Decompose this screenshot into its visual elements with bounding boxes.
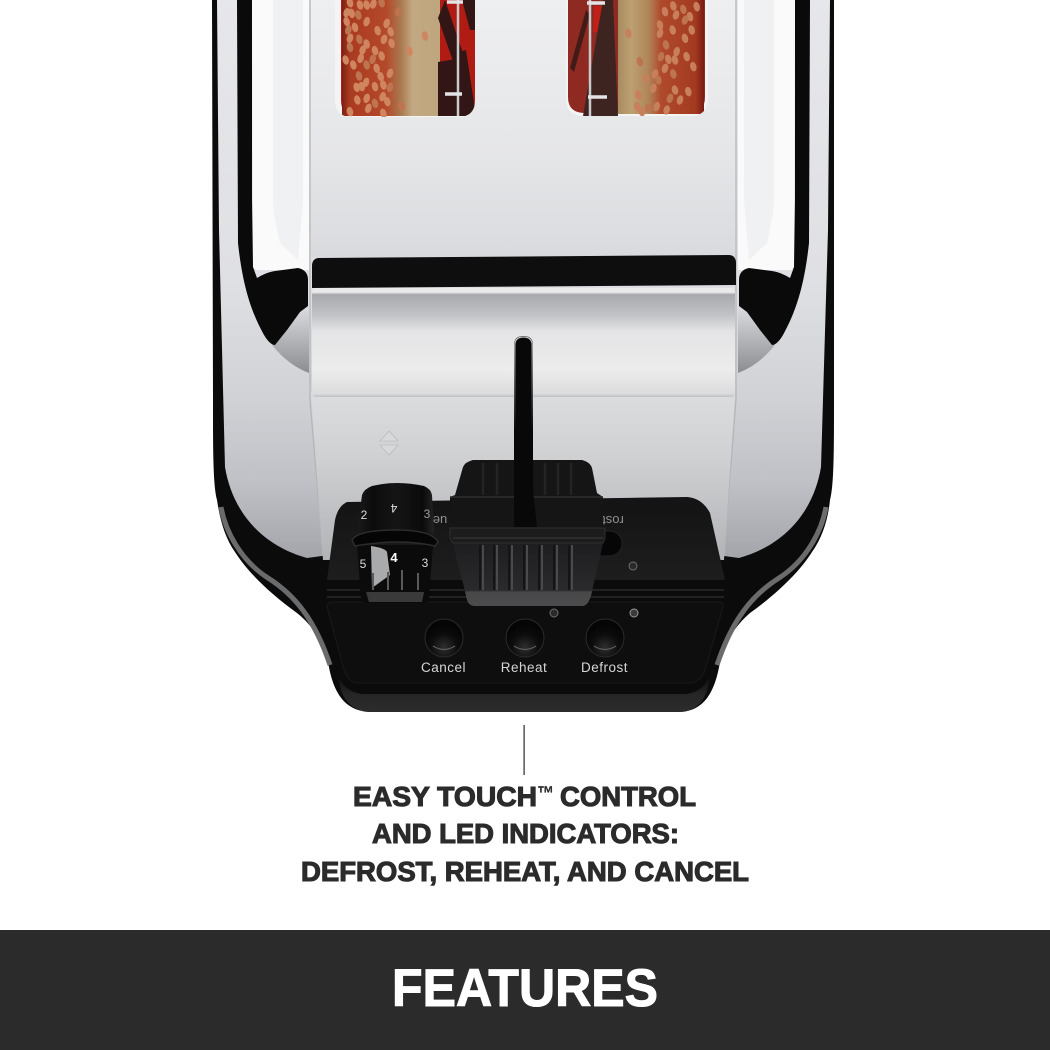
carriage block rim bbox=[450, 496, 603, 498]
left dark stripe and blob bbox=[237, 0, 308, 345]
reheat button: Reheat bbox=[501, 660, 547, 675]
base lip bbox=[338, 676, 710, 712]
callout leader line bbox=[524, 725, 525, 775]
upper control housing bbox=[327, 497, 725, 580]
callout text: CONTROL bbox=[560, 781, 696, 812]
rolled chrome section bbox=[312, 288, 735, 397]
chrome body bbox=[217, 0, 830, 558]
dial numbers: 4 bbox=[390, 550, 398, 565]
callout text: EASY TOUCH bbox=[353, 781, 537, 812]
dial lower cylinder bbox=[357, 545, 433, 603]
lever stem bbox=[514, 336, 537, 527]
housing LED bbox=[629, 562, 637, 570]
dial numbers: 3 bbox=[422, 556, 429, 570]
reflected housing text: ue bbox=[433, 513, 447, 528]
dial bottom band bbox=[366, 592, 424, 602]
base sheen right bbox=[717, 507, 826, 665]
sesame seeds right bbox=[624, 1, 701, 117]
pad ribs bbox=[483, 545, 572, 590]
toaster base silhouette bbox=[212, 0, 834, 712]
lever front pad bbox=[450, 528, 605, 606]
center plate edges bbox=[310, 0, 736, 555]
right toast slot bbox=[566, 0, 708, 117]
banner title: FEATURES bbox=[392, 959, 658, 1017]
right lower wedge bbox=[738, 304, 775, 373]
browning dial bbox=[352, 483, 438, 603]
dial numbers bbox=[360, 501, 431, 571]
defrost button: Defrost bbox=[581, 660, 628, 675]
features banner bbox=[0, 930, 1050, 1050]
left lower wedge bbox=[272, 304, 309, 373]
right dark stripe and blob bbox=[739, 0, 810, 345]
reheat button bbox=[501, 619, 547, 675]
callout text: ™ bbox=[537, 783, 554, 805]
reheat LED bbox=[550, 609, 558, 617]
cancel button: Cancel bbox=[421, 660, 466, 675]
housing step lines bbox=[327, 590, 724, 597]
reflected housing text bbox=[433, 513, 624, 528]
pad top band bbox=[450, 528, 605, 543]
right inner highlight bbox=[738, 0, 795, 270]
left inner highlight bbox=[252, 0, 309, 270]
housing oval switch bbox=[590, 531, 622, 556]
base sheen left bbox=[221, 507, 330, 665]
cancel button bbox=[421, 619, 466, 675]
toaster wire left bbox=[457, 0, 459, 116]
dial numbers: 2 bbox=[361, 508, 368, 522]
dial upper cylinder bbox=[357, 483, 434, 533]
toaster wire right bbox=[589, 0, 591, 116]
shade selector arrows icon bbox=[380, 431, 398, 455]
dark reflection band bbox=[312, 255, 736, 288]
left side panel reflections bbox=[237, 0, 309, 373]
reflected housing text: rost bbox=[602, 513, 624, 528]
callout text: DEFROST, REHEAT, AND CANCEL bbox=[301, 856, 749, 887]
lever carriage ribs back bbox=[483, 463, 571, 495]
dial ring bbox=[352, 530, 438, 546]
lever back carriage bbox=[450, 460, 603, 530]
left soft highlight band bbox=[273, 0, 303, 260]
dial ridges bbox=[373, 570, 418, 590]
lower center plate bbox=[311, 392, 735, 560]
right soft highlight band bbox=[744, 0, 774, 260]
callout text: AND LED INDICATORS: bbox=[372, 818, 679, 849]
dial numbers: 3 bbox=[424, 507, 431, 521]
right side panel reflections bbox=[738, 0, 810, 373]
center top plate bbox=[311, 0, 735, 258]
toaster illustration bbox=[212, 0, 834, 712]
right toaster rack bbox=[593, 6, 603, 32]
dial numbers: 4 bbox=[390, 501, 397, 515]
left toast slot bbox=[335, 0, 476, 119]
lower control panel bbox=[327, 602, 723, 683]
left toaster rack bbox=[438, 0, 476, 116]
callout text bbox=[301, 781, 749, 887]
dial numbers: 5 bbox=[360, 557, 367, 571]
dial reflection bbox=[371, 546, 390, 588]
sesame seeds left bbox=[341, 0, 429, 119]
defrost LED bbox=[630, 609, 638, 617]
defrost button bbox=[581, 619, 628, 675]
